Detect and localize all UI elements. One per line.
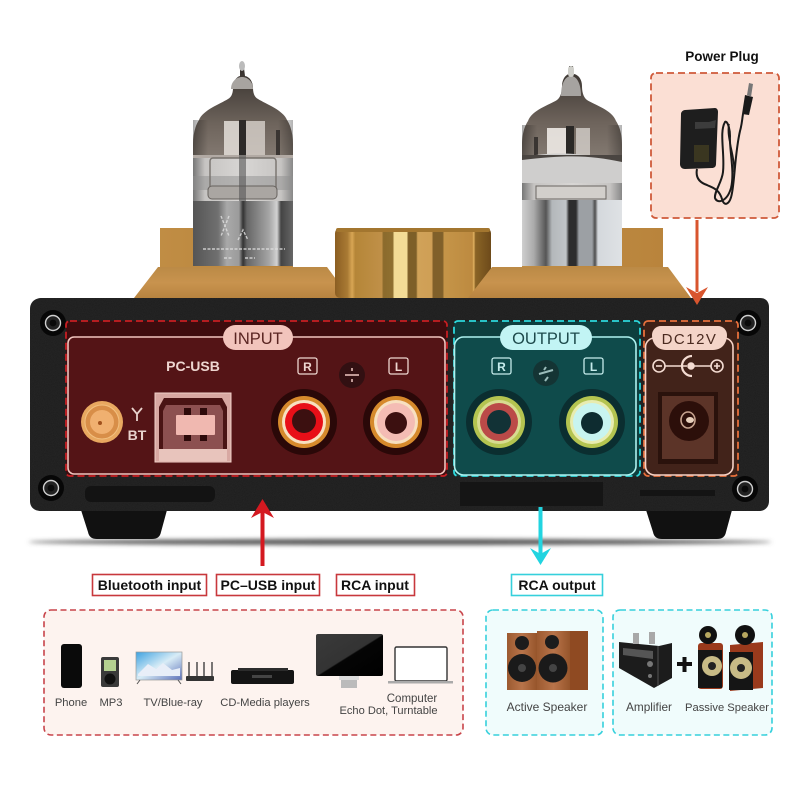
label: Passive Speaker: Passive Speaker [685, 702, 769, 714]
arrow: power to DC jack [686, 220, 708, 305]
L channel tag: L [395, 360, 402, 374]
icon: RCA socket input L [363, 389, 429, 455]
icon: USB-B port [155, 393, 231, 462]
corner screw bottom left [38, 475, 64, 501]
power plug title: Power Plug [685, 49, 759, 64]
icon: RCA socket output L [559, 389, 625, 455]
L channel tag [584, 358, 603, 374]
panel screw [339, 362, 365, 388]
icon: RCA socket output R [466, 389, 532, 455]
vacuum tube left [193, 61, 293, 266]
DC12V pill: DC12V [662, 331, 717, 348]
label: PC-USB input: PC–USB input [221, 577, 316, 593]
OUTPUT pill: OUTPUT [512, 330, 580, 348]
icon: active speakers [507, 631, 588, 690]
corner screw bottom right [732, 476, 758, 502]
R channel tag: R [303, 360, 312, 374]
R channel tag [492, 358, 511, 374]
label: Bluetooth input: Bluetooth input [98, 577, 202, 593]
icon: desktop monitor [316, 634, 383, 688]
PC-USB label: PC-USB [166, 358, 220, 374]
icon: DC power jack [658, 392, 718, 464]
gold rear ring right [522, 228, 663, 268]
label: Active Speaker: Active Speaker [507, 700, 587, 714]
gold center cylinder [335, 228, 491, 298]
icon: CD player [231, 668, 294, 684]
label: RCA output: RCA output [518, 577, 596, 593]
chassis [30, 298, 769, 511]
L channel tag [389, 358, 408, 374]
panel screw [533, 360, 559, 386]
plus sign [677, 657, 692, 672]
Bluetooth antenna label [128, 408, 147, 443]
label: Echo Dot, Turntable: Echo Dot, Turntable [339, 705, 438, 717]
R channel tag [298, 358, 317, 374]
Bluetooth antenna label: BT [128, 427, 147, 443]
panel: input sources [44, 610, 463, 735]
arrow: output down [530, 507, 551, 565]
icon: laptop [388, 647, 453, 684]
panel: INPUT overlay [66, 321, 447, 476]
label: CD-Media players: CD-Media players [220, 697, 310, 709]
label: RCA input: RCA input [341, 577, 409, 593]
arrow: input up [251, 499, 274, 566]
corner screw top right [735, 310, 761, 336]
INPUT pill [223, 325, 293, 350]
R channel tag: R [497, 360, 506, 374]
label: RCA input [336, 574, 414, 596]
panel: power plug [651, 73, 779, 218]
label: Bluetooth input [92, 574, 206, 596]
icon: SMA Bluetooth antenna socket [81, 401, 123, 443]
icon: RCA socket input R [271, 389, 337, 455]
amplifier feet [28, 510, 772, 545]
DC12V pill [652, 326, 727, 350]
panel: OUTPUT overlay [454, 321, 640, 476]
label: MP3: MP3 [99, 697, 123, 709]
panel: DC 12V overlay [644, 321, 738, 476]
corner screw top left [40, 310, 66, 336]
gold trapezoid base left [134, 267, 350, 298]
label: RCA output [512, 574, 602, 596]
icon: MP3 player [101, 657, 119, 687]
icon: passive speakers [698, 625, 763, 691]
panel: active speaker [486, 610, 603, 735]
icon: phone [61, 644, 82, 688]
vacuum tube right [522, 66, 622, 266]
panel: amplifier and passive speaker [613, 610, 772, 735]
gold trapezoid base right [468, 267, 691, 298]
label: Phone: Phone [55, 697, 87, 709]
INPUT pill: INPUT [233, 330, 283, 348]
label: Computer: Computer [387, 693, 437, 705]
icon: DC polarity symbol [653, 356, 723, 376]
label: TV/Blue-ray: TV/Blue-ray [143, 697, 203, 709]
icon: power adapter [680, 83, 753, 204]
icon: TV and router [136, 652, 214, 684]
gold rear ring left [160, 228, 293, 268]
OUTPUT pill [500, 325, 592, 350]
icon: tube amplifier [619, 632, 672, 688]
L channel tag: L [590, 360, 597, 374]
label: Amplifier: Amplifier [626, 700, 672, 714]
